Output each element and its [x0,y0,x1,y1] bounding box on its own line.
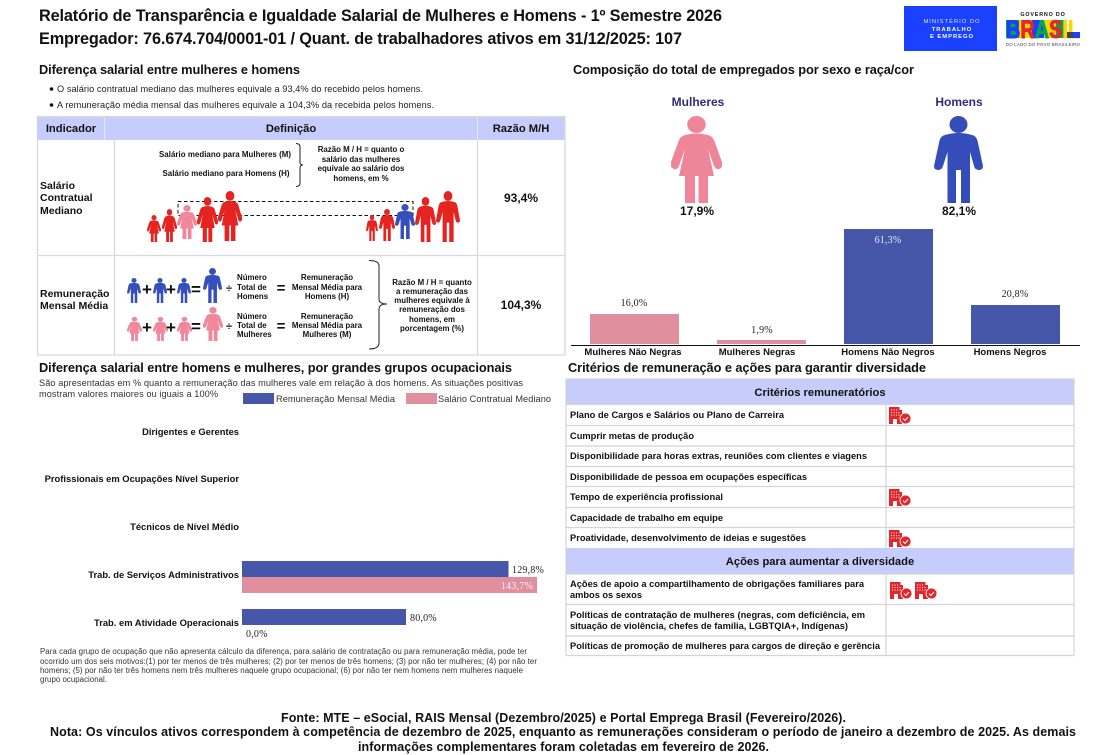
formula: women [127,307,363,341]
footnote: homens; (5) por não ter três homens nem três mulheres naquele grupo ocupacional; (6) por não ter nem homens nem mulheres naquele [40,666,524,675]
title: Empregador: 76.674.704/0001-01 / Quant. de trabalhadores ativos em 31/12/2025: 107 [39,30,682,48]
bar: homens negros: Homens Negros [974,347,1046,358]
icon: empresa com critério [889,489,911,506]
legend [243,393,551,404]
icon: empresa com ação [890,582,912,599]
chart description [39,378,523,399]
figure: homens: 82,1% [942,204,976,218]
bar: homens negros: 20,8% [1002,289,1028,300]
criteria rows: Cumprir metas de produção [570,431,694,441]
source and note: Fonte: MTE – eSocial, RAIS Mensal (Dezembro/2025) e Portal Emprega Brasil (Fevereiro/2026). [281,711,846,725]
row label: salário contratual mediano: Contratual [40,192,93,204]
bar: mulheres negras [717,325,806,358]
table header: Indicador [46,123,97,135]
group: profissionais nível superior: Profissionais em Ocupações Nível Superior [45,473,239,484]
formula: women: Total de [237,321,267,330]
criteria rows [570,410,867,543]
brace [369,260,387,349]
legend: Salário Contratual Mediano [438,394,551,404]
header: ações diversidade: Ações para aumentar a diversidade [726,556,914,568]
chart description: mostram valores maiores ou iguais a 100% [39,389,218,399]
logo: governo do brasil: GOVERNO DO [1020,12,1066,18]
criteria rows: Proatividade, desenvolvimento de ideias e sugestões [570,533,806,543]
logo: governo do brasil: BRASIL [1006,16,1080,44]
logo: ministério do trabalho e emprego: E EMPREGO [930,34,974,40]
formula: men: Mensal Média para [292,283,363,292]
definition: razão m/h salário: homens, em % [333,174,389,183]
value: 104,3%: 104,3% [501,298,542,312]
legend: Remuneração Mensal Média [276,394,396,404]
panel: criteria table [566,379,1074,656]
brace [296,144,303,186]
definition: razão m/h salário [318,145,405,183]
formula: women: Remuneração [301,312,353,321]
action rows: Políticas de contratação de mulheres (negras, com deficiência, em [570,610,865,620]
bar: mulheres negras: 1,9% [751,325,773,336]
logo: governo do brasil: DO LADO DO POVO BRASILEIRO [1006,42,1081,47]
heading: diferença por grupos ocupacionais: Diferença salarial entre homens e mulheres, por grandes grupos ocupacionais [39,360,512,375]
formula: men [127,268,363,303]
criteria rows: Capacidade de trabalho em equipe [570,513,723,523]
row label: remuneração mensal média: Remuneração [40,288,109,300]
formula: men: = [277,280,286,297]
criteria rows: Tempo de experiência profissional [570,492,723,502]
figure: homens: Homens [935,95,983,109]
action rows: situação de violência, chefes de família, LGBTQIA+, Indígenas) [570,621,848,631]
icons: women ordered by salary [147,191,242,242]
heading: diferença salarial: Diferença salarial entre mulheres e homens [39,62,300,77]
row label: salário contratual mediano: Salário [40,180,75,192]
definition labels: salário mediano: Salário mediano para Homens (H) [162,169,290,178]
title [39,7,722,48]
formula: women: = [191,317,201,336]
formula: women: Número [237,312,267,321]
footnote [40,647,537,684]
action rows: Ações de apoio a compartilhamento de obrigações familiares para [570,579,865,589]
formula: women: Mulheres (M) [303,330,352,339]
bar: mulheres não negras [584,298,682,358]
formula: men: Homens [237,292,269,301]
footnote: Para cada grupo de ocupação que não apresenta cálculo da diferença, para salário de contratação ou para remuneração média, pode ter [40,647,527,656]
footnote: ocorrido um dos seis motivos:(1) por ter menos de três mulheres; (2) por ter menos de três homens; (3) por não ter mulheres; (4) por não ter [40,657,537,666]
dashed median box [178,202,413,216]
formula: women: ÷ [226,321,232,333]
formula: men: Homens (H) [305,292,350,301]
source and note [50,711,1076,754]
table header: Definição [266,123,316,135]
formula: women: + [166,318,176,337]
bullet list [50,84,434,110]
icons: men ordered by salary [366,191,460,242]
definition: razão m/h remuneração: homens, em [409,315,455,324]
bullet list: A remuneração média mensal das mulheres equivale a 104,3% da recebida pelos homens. [57,100,434,110]
criteria rows: Plano de Cargos e Salários ou Plano de Carreira [570,410,785,420]
definition: razão m/h remuneração [392,278,472,333]
header: ações diversidade [566,548,1074,574]
chart description: São apresentadas em % quanto a remuneração das mulheres vale em relação à dos homens. As situações positivas [39,378,523,388]
panel: indicator table [37,116,565,355]
figure: homens [934,95,983,218]
formula: women: = [277,318,286,335]
header: critérios remuneratórios [566,379,1074,404]
formula: men: Total de [237,283,267,292]
icon: empresa com critério [889,530,911,547]
heading: composição: Composição do total de empregados por sexo e raça/cor [573,62,914,77]
group: atividade operacionais: Trab. em Atividade Operacionais [94,617,239,628]
table header: Razão M/H [493,123,549,135]
action rows [570,579,881,651]
group: serviços administrativos: Trab. de Serviços Administrativos [88,569,239,580]
logo: ministério do trabalho e emprego [904,6,997,51]
icon: empresa com critério [889,407,911,424]
formula: women: + [142,318,152,337]
definition: razão m/h remuneração: porcentagem (%) [400,324,464,333]
formula: men: Número [237,273,267,282]
bar chart: grupos ocupacionais [45,426,544,640]
definition labels: salário mediano: Salário mediano para Mulheres (M) [159,150,291,159]
source and note: informações complementares foram coletadas em fevereiro de 2026. [358,740,769,754]
bar: homens não negros: Homens Não Negros [841,347,935,358]
bar: mulheres não negras: 16,0% [621,298,647,309]
bar: homens não negros [841,229,935,358]
bar: homens não negros: 61,3% [875,235,901,246]
action rows: Políticas de promoção de mulheres para cargos de direção e gerência [570,641,881,651]
formula: women: Mulheres [237,330,272,339]
source and note: Nota: Os vínculos ativos correspondem à competência de dezembro de 2025, enquanto as remunerações consideram o período de janeiro a dezembro de 2025. As demais [50,725,1076,739]
definition labels: salário mediano [159,150,291,178]
group: serviços administrativos: 143,7% [501,581,533,592]
definition: razão m/h remuneração: Razão M / H = quanto [392,278,472,287]
definition: razão m/h salário: equivale ao salário dos [318,164,405,173]
formula: men: ÷ [226,283,232,295]
bar: mulheres não negras: Mulheres Não Negras [584,347,682,358]
formula: men: = [191,280,201,299]
definition: razão m/h remuneração: a remuneração das [396,287,469,296]
title: Relatório de Transparência e Igualdade Salarial de Mulheres e Homens - 1º Semestre 2026 [39,7,722,25]
table header [37,116,565,140]
row label: salário contratual mediano: Mediano [40,205,83,217]
action rows: ambos os sexos [570,590,642,600]
logo: ministério do trabalho e emprego: TRABALHO [932,27,972,33]
criteria rows: Disponibilidade para horas extras, reuniões com clientes e viagens [570,451,867,461]
icon: empresa com ação [915,582,937,599]
group: atividade operacionais: 80,0% [410,613,437,624]
row label: remuneração mensal média [40,288,109,312]
formula: men: + [166,280,176,299]
formula: men: + [142,280,152,299]
figure: mulheres: Mulheres [672,95,725,109]
definition: razão m/h remuneração: remuneração dos [399,305,466,314]
row label: salário contratual mediano [40,180,93,217]
group: atividade operacionais: 0,0% [246,629,268,640]
group: dirigentes e gerentes: Dirigentes e Gerentes [142,426,239,437]
logo: ministério do trabalho e emprego: MINISTÉRIO DO [923,18,981,25]
row label: remuneração mensal média: Mensal Média [40,300,108,312]
heading: critérios: Critérios de remuneração e ações para garantir diversidade [568,360,926,375]
criteria rows: Disponibilidade de pessoa em ocupações específicas [570,472,807,482]
figure: mulheres [670,95,725,218]
figure: mulheres: 17,9% [680,204,714,218]
definition: razão m/h remuneração: mulheres equivale à [394,296,470,305]
header: critérios remuneratórios: Critérios remuneratórios [754,387,886,399]
group: serviços administrativos [88,561,544,593]
value: 93,4%: 93,4% [504,191,538,205]
formula: men: Remuneração [301,273,353,282]
bar: mulheres negras: Mulheres Negras [719,347,795,358]
group: serviços administrativos: 129,8% [512,565,544,576]
footnote: grupo ocupacional. [40,675,107,684]
definition: razão m/h salário: Razão M / H = quanto o [318,145,404,154]
formula: women: Mensal Média para [292,321,363,330]
bar: homens negros [971,289,1060,358]
definition: razão m/h salário: salário das mulheres [322,155,401,164]
group: atividade operacionais [94,609,437,640]
bullet list: O salário contratual mediano das mulheres equivale a 93,4% do recebido pelos homens. [57,84,423,94]
bar chart: sexo e raça/cor [571,229,1080,358]
group: técnicos: Técnicos de Nível Médio [130,521,239,532]
